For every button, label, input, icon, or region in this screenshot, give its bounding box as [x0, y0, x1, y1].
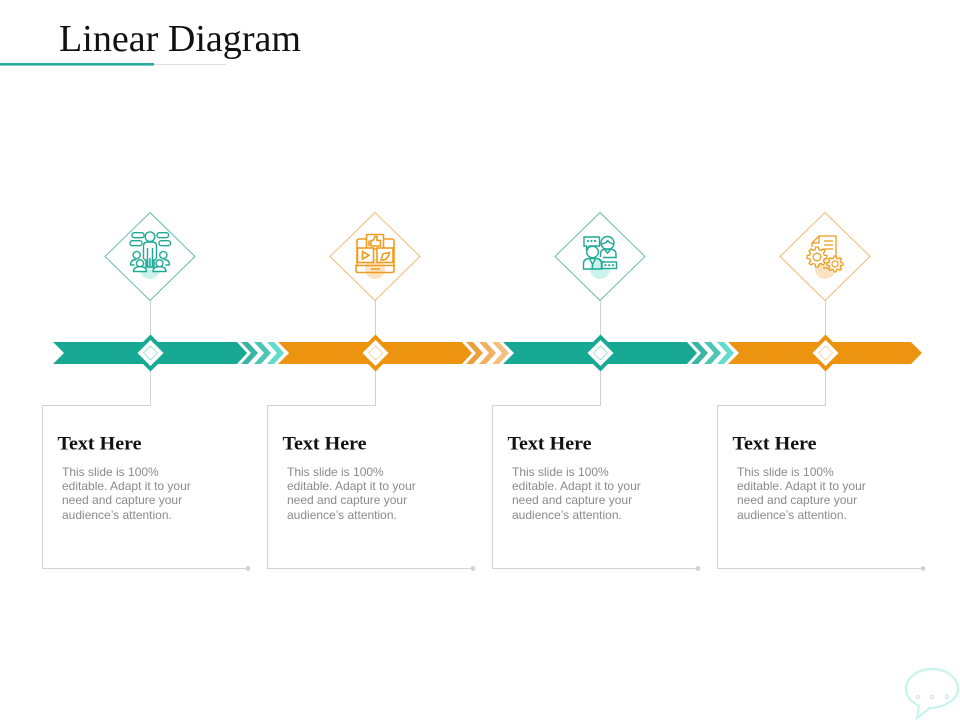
icon diamond 4: document with gears	[780, 212, 870, 300]
text block 1: This slide is 100%	[62, 465, 159, 479]
text block 2: need and capture your	[287, 493, 407, 507]
marker 1	[132, 334, 169, 372]
marker 2	[357, 334, 394, 372]
icon diamond 1: people talking	[105, 212, 195, 300]
text block 3: need and capture your	[512, 493, 632, 507]
text block 3: audience’s attention.	[512, 508, 622, 522]
icon diamond 3: support chat	[555, 212, 645, 300]
text block 2: This slide is 100%	[287, 465, 384, 479]
text block 1	[58, 434, 191, 522]
text block 2: audience’s attention.	[287, 508, 397, 522]
text block 2: editable. Adapt it to your	[287, 479, 416, 493]
arrow bar 4	[728, 342, 922, 364]
chevrons 2	[466, 342, 509, 364]
chevrons 1	[241, 342, 284, 364]
text block 4: editable. Adapt it to your	[737, 479, 866, 493]
text block 4: Text Here	[732, 434, 816, 454]
chevrons 3	[691, 342, 734, 364]
icon diamond 2: social media	[330, 212, 420, 300]
text block 3: editable. Adapt it to your	[512, 479, 641, 493]
text block 4: This slide is 100%	[737, 465, 834, 479]
text block 3	[508, 434, 641, 522]
title: Linear Diagram	[59, 18, 301, 60]
title underline	[0, 63, 226, 66]
text block 4	[732, 434, 866, 522]
text block 3: Text Here	[508, 434, 592, 454]
connector lines and text boxes	[42, 301, 925, 571]
arrow bar 1	[53, 342, 247, 364]
text block 1: Text Here	[58, 434, 142, 454]
text block 4: need and capture your	[737, 493, 857, 507]
text block 1: need and capture your	[62, 493, 182, 507]
text block 2: Text Here	[282, 434, 366, 454]
text block 1: audience’s attention.	[62, 508, 172, 522]
marker 4	[807, 334, 844, 372]
marker 3	[582, 334, 619, 372]
icon: speech bubble	[906, 669, 958, 718]
text block 1: editable. Adapt it to your	[62, 479, 191, 493]
arrow bar 3	[503, 342, 697, 364]
text block 4: audience’s attention.	[737, 508, 847, 522]
arrow bar 2	[278, 342, 472, 364]
text block 2	[282, 434, 416, 522]
text block 3: This slide is 100%	[512, 465, 609, 479]
